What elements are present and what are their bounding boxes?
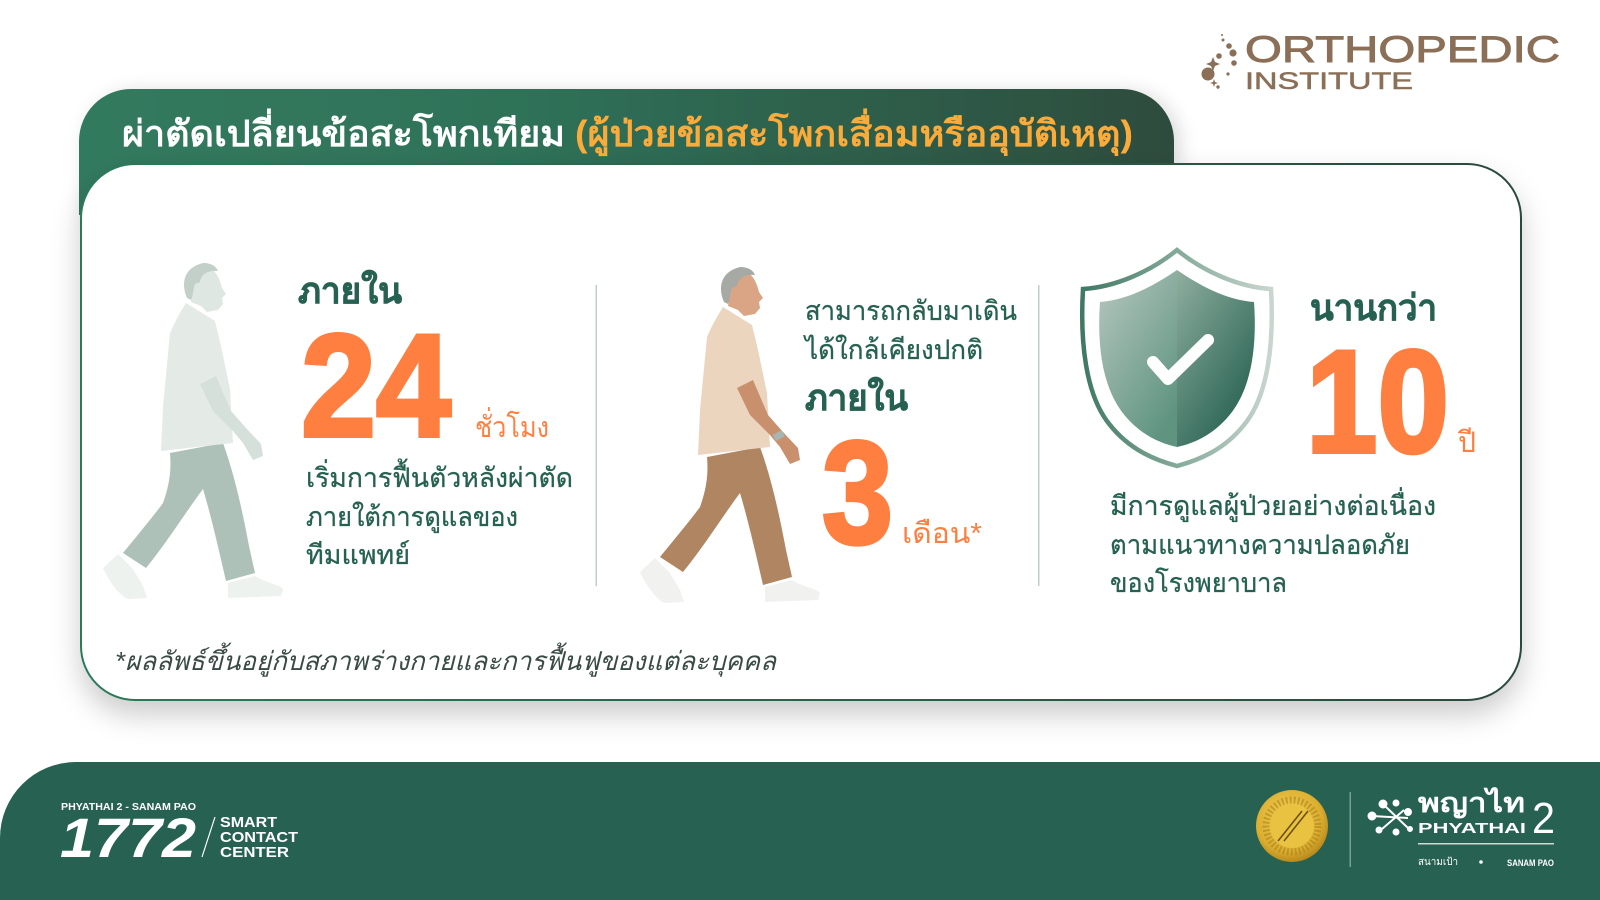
- number: 10: 10: [1306, 320, 1449, 483]
- description: can walk normally: ได้ใกล้เคียงปกติ: [803, 334, 983, 365]
- footer band: [0, 762, 1600, 900]
- description: continuous care: ตามแนวทางความปลอดภัย: [1110, 530, 1410, 560]
- icon: shield with check: [1082, 250, 1272, 466]
- logo: Orthopedic Institute: ORTHOPEDIC: [1245, 29, 1560, 70]
- description: continuous care: มีการดูแลผู้ป่วยอย่างต่อเนื่อง: [1110, 487, 1436, 522]
- arm: [200, 376, 263, 460]
- trousers: [123, 443, 255, 581]
- logo: 1772 contact center: SMART: [220, 814, 277, 831]
- footnote: *ผลลัพธ์ขึ้นอยู่กับสภาพร่างกายและการฟื้นฟูของแต่ละบุคคล: [115, 642, 777, 677]
- illustration: walking man, faded: [103, 263, 283, 599]
- text: longer than: นานกว่า: [1310, 287, 1437, 328]
- head: [728, 274, 763, 316]
- logo: Phyathai 2 Sanam Pao: พญาไท: [1418, 787, 1525, 819]
- head: [191, 270, 226, 312]
- text: within: ภายใน: [298, 269, 402, 311]
- logo: 1772 contact center: [60, 802, 298, 869]
- unit: months: เดือน*: [902, 518, 982, 550]
- title text: [122, 108, 1133, 157]
- logo: Phyathai 2 Sanam Pao: สนามเป้า: [1418, 856, 1458, 868]
- description: can walk normally: [803, 296, 1017, 365]
- description: continuous care: ของโรงพยาบาล: [1110, 568, 1287, 598]
- shoes: [103, 554, 283, 599]
- badge: JCI gold seal: [1256, 790, 1328, 862]
- arm: [737, 380, 800, 464]
- logo: Phyathai 2 Sanam Pao: 2: [1532, 794, 1555, 843]
- shirt: [698, 307, 770, 455]
- title text: (ผู้ป่วยข้อสะโพกเสื่อมหรืออุบัติเหตุ): [575, 108, 1133, 157]
- text: within 2: ภายใน: [805, 376, 908, 418]
- logo: 1772 contact center: 1772: [60, 806, 196, 869]
- title tab: [79, 89, 1174, 215]
- logo: Phyathai 2 Sanam Pao: SANAM PAO: [1507, 858, 1554, 868]
- number: 24: 24: [301, 304, 451, 467]
- logo: Phyathai 2 Sanam Pao: PHYATHAI: [1418, 820, 1526, 837]
- title text: ผ่าตัดเปลี่ยนข้อสะโพกเทียม: [122, 108, 565, 154]
- hair: [184, 263, 218, 300]
- shirt: [161, 303, 233, 451]
- logo: 1772 contact center: CONTACT: [220, 829, 298, 846]
- watch: [773, 430, 785, 441]
- logo: 1772 contact center: CENTER: [220, 844, 289, 861]
- number: 3: 3: [822, 411, 893, 574]
- logo: 1772 contact center: PHYATHAI 2 - SANAM PAO: [61, 802, 196, 813]
- hair: [721, 267, 755, 304]
- description: continuous care: [1110, 487, 1436, 598]
- description: recovery start: ภายใต้การดูแลของ: [306, 501, 518, 533]
- logo: Orthopedic Institute: INSTITUTE: [1245, 68, 1413, 95]
- description: can walk normally: สามารถกลับมาเดิน: [805, 296, 1017, 326]
- logo: Orthopedic Institute: [1202, 29, 1560, 95]
- unit: years: ปี: [1458, 427, 1476, 459]
- main panel: [81, 164, 1521, 700]
- unit: hours: ชั่วโมง: [475, 407, 549, 444]
- logo: Phyathai 2 Sanam Pao: [1368, 787, 1555, 868]
- description: recovery start: ทีมแพทย์: [306, 539, 410, 570]
- description: recovery start: เริ่มการฟื้นตัวหลังผ่าตัด: [306, 458, 573, 493]
- description: recovery start: [306, 458, 573, 570]
- illustration: walking man, coloured: [640, 267, 820, 603]
- icon: molecule: [1368, 800, 1412, 834]
- shoes: [640, 558, 820, 603]
- trousers: [660, 447, 792, 585]
